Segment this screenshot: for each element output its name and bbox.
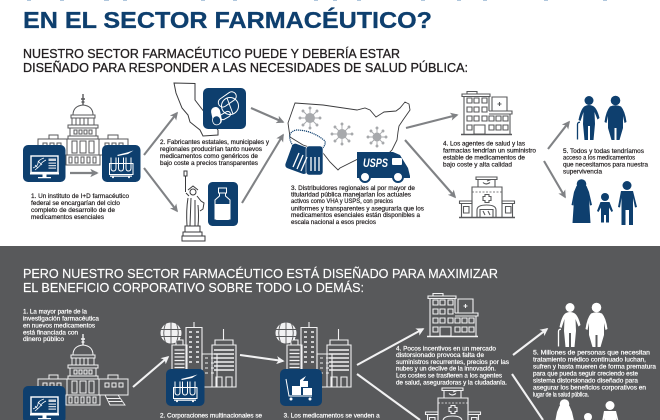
icon: research monitor with DNA [23,386,66,420]
panel: corporate profit system [0,246,660,420]
icon: capitol building [38,334,128,405]
text: step 4: distorsionado provoca falta de [396,353,485,359]
heading: top section: NUESTRO SECTOR FARMACÉUTICO PUEDE Y DEBERÍA ESTAR [23,46,400,61]
icon: trolley with boxes [280,369,322,406]
text: step 1: dinero público [23,337,65,343]
icon: family [554,399,620,420]
text: step 5: lugar de la salud pública. [533,392,589,398]
icon: test tubes [102,145,140,182]
heading: bottom section: PERO NUESTRO SECTOR FARMACÉUTICO ESTÁ DISEÑADO PARA MAXIMIZAR [23,266,498,281]
text: step 4: nubes y un declive de la innovación. [396,367,496,373]
icon: corporate city [276,322,351,387]
icon: pills square [203,88,246,129]
arrow: to state manufacturers [144,113,177,155]
text: step 3: activos como VHA y USPS, con precios [291,199,393,205]
icon: family [572,179,637,225]
icon: corporate city [160,322,236,387]
arrow: to city manufacturers [144,168,177,211]
text: step 5 [533,351,657,398]
text: step 1: federal se encargarían del ciclo [31,201,121,207]
icon: USPS truck: USPS [363,158,388,170]
icon: research monitor with DNA [23,145,66,182]
text: step 3: 3. Los medicamentos se venden a [284,414,380,420]
text: step 1: investigación farmacéutica [23,316,100,322]
icon: clinic [459,177,515,218]
arrow: to corporations [133,357,168,387]
panel: public health system [23,83,649,241]
text: step 3: uniformes y transparentes y aseguraría que los [291,206,424,212]
text: step 5: acceso a los medicamentos [563,156,635,162]
text: step 5: 5. Todos y todas tendríamos [563,149,644,155]
arrow: to hospital [406,115,457,128]
icon: elderly couple [558,303,608,347]
icon: elderly couple [578,96,626,140]
text: step 4: suministros recurrentes, precios por las [396,360,509,366]
icon: virus markers [299,107,387,147]
arrow: to elders [548,122,569,149]
text: step 1: completo de desarrollo de de [31,208,116,214]
text: step 4 [396,346,509,386]
icon: capitol building [38,94,128,165]
text: step 4: bajo coste y alta calidad [443,163,512,169]
arrow: to family [544,161,565,197]
arrow: to clinic [405,140,455,197]
text: step 3: medicamentos esenciales están disponibles a [291,213,421,219]
text: step 5: sufren y hasta mueren de forma prematura [533,364,657,370]
text: step 5: 5. Millones de personas que necesitan [533,351,650,357]
icon: California outline [174,83,218,136]
text: step 4: de salud, aseguradoras y la ciudadanía. [396,380,507,386]
text: step 5 [563,149,649,176]
text: step 4: Los costes se trasfieren a los agentes [396,374,502,380]
icon: vial square [208,182,238,226]
icon: hospital [427,294,478,336]
text: step 2: medicamentos como genéricos de [160,154,259,160]
text: step 5: para que pueda seguir creciendo este [533,371,639,377]
text: step 1: 1. Un instituto de I+D farmacéutico [31,194,130,200]
text: step 1 [31,194,130,221]
text: step 5: sistema distorsionado diseñado para [533,378,639,384]
text: step 5: asegurar los beneficios corporativos en [533,386,646,392]
heading: top section: DISEÑADO PARA RESPONDER A LAS NECESIDADES DE SALUD PÚBLICA: [23,60,468,75]
text: step 1: en nuevos medicamentos [23,323,95,329]
text: step 2 [160,140,269,167]
heading: top section [23,46,468,75]
text: step 1 [23,310,100,343]
text: step 3: escala nacional a esos precios [291,220,376,226]
heading: bottom section [24,266,498,292]
arrow: to hospital [357,329,423,365]
arrow: to distributors (upper) [251,108,283,122]
heading: bottom section: EL BENEFICIO CORPORATIVO SOBRE TODO LO DEMÁS: [23,280,364,295]
title: EN EL SECTOR FARMACÉUTICO? [23,6,432,33]
icon: hospital [461,92,512,134]
arrow: to family [512,374,543,420]
clipped text fragments at top edge [27,0,607,1]
text: step 3: 3. Distribuidores regionales al por mayor de [291,186,416,192]
text: step 3 [291,186,424,226]
icon: dog tags [284,130,325,175]
arrow: to elders [513,329,547,355]
arrow: to clinic [357,374,420,420]
text: step 2: regionales producirían tanto nuevos [160,147,262,153]
arrow: to distributors (lower) [242,135,283,203]
text: step 4: 4. Los agentes de salud y las [443,141,525,147]
text: step 1: medicamentos esenciales [31,215,104,221]
icon: US map [288,102,410,170]
text: step 2: 2. Fabricantes estatales, municipales y [160,140,269,146]
text: step 2: 2. Corporaciones multinacionales se [160,414,263,420]
text: step 4: 4. Pocos incentivos en un mercado [396,346,497,352]
text: step 4 [443,141,537,169]
text: step 1: está financiada con [23,330,78,336]
text: step 5: tratamiento médico continuado luchan, [533,357,646,363]
icon: test tubes [166,369,204,406]
text: step 1: 1. La mayor parte de la [23,310,88,316]
text: step 3: titularidad pública manejarían los actuales [291,192,411,198]
icon: Statue of Liberty [182,171,205,241]
text: step 2: bajo coste a precios transparentes [160,161,258,167]
text: step 4: estable de medicamentos de [443,155,526,161]
text: step 4: farmacias tendrían un suministro [443,149,537,155]
icon: clinic [425,388,481,420]
text: step 5: que necesitamos para nuestra [563,163,649,169]
arrow: to sales [240,355,283,361]
icon: USPS truck [357,152,410,182]
text: step 5: supervivencia [563,170,603,176]
arrow: research to tubes [70,172,97,174]
